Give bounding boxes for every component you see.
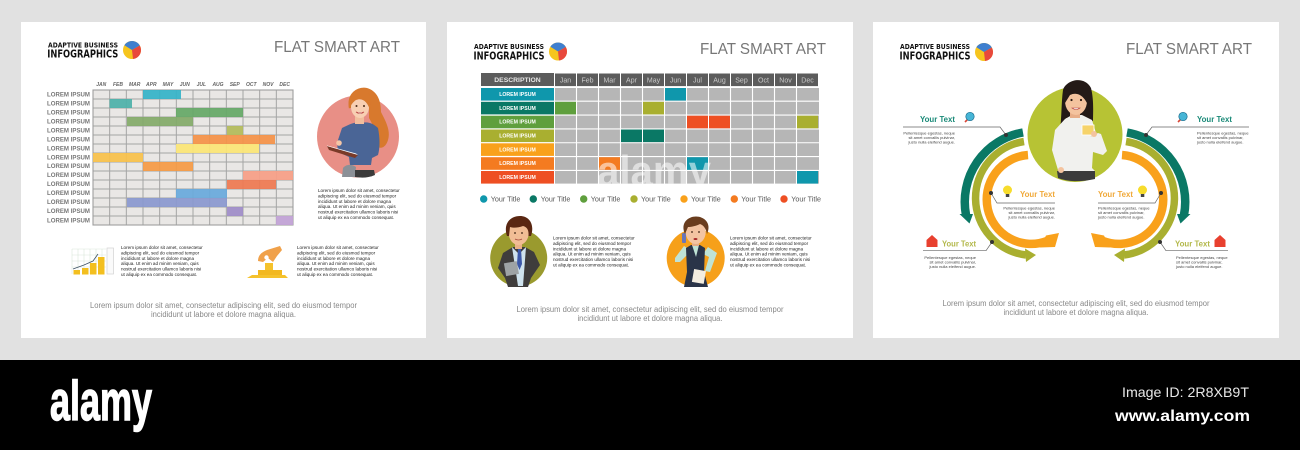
table header: DESCRIPTION: [494, 77, 541, 84]
footer text: [516, 305, 784, 323]
text block: aliqua. Ut enim ad minim veniam, quis: [730, 252, 808, 257]
icon: hand placing coin on coin stack: [247, 246, 288, 278]
icon: businesswoman with card in green circle: [1028, 80, 1122, 182]
table header: Nov: [779, 77, 792, 84]
logo: adaptive business infographics: ADAPTIVE BUSINESS: [474, 43, 544, 51]
row description cells: LOREM IPSUM: [499, 147, 536, 153]
footer text: Lorem ipsum dolor sit amet, consectetur adipiscing elit, sed do eiusmod tempor: [516, 305, 784, 314]
label: top right: sit amet convallis pulvinar,: [1197, 135, 1243, 140]
row labels: LOREM IPSUM: [47, 102, 90, 108]
text block: incididunt ut labore et dolore magna: [318, 199, 391, 204]
label: middle left: justo nulla eleifend augue.: [1008, 214, 1055, 220]
chart: gantt grid: [93, 90, 293, 225]
label: bottom left: sit amet convallis pulvinar,: [930, 259, 976, 264]
icon: magnifier: [965, 112, 974, 122]
legend: Your Title: [491, 195, 520, 204]
table header: Feb: [581, 77, 594, 84]
label: top right: Your Text: [1197, 114, 1232, 124]
legend: Your Title: [591, 195, 620, 204]
label: bottom left: justo nulla eleifend augue.: [929, 264, 976, 269]
table header: Dec: [801, 77, 814, 84]
text block: ut aliquip ex ea commodo consequat.: [318, 215, 394, 220]
row labels: [47, 93, 90, 225]
legend: [480, 195, 821, 204]
row labels: LOREM IPSUM: [47, 182, 90, 188]
month labels: FEB: [113, 82, 123, 88]
row labels: LOREM IPSUM: [47, 147, 90, 153]
text block: adipiscing elit, sed do eiusmod tempor: [730, 241, 809, 246]
label: middle left: [989, 186, 1056, 220]
row description cells: LOREM IPSUM: [499, 175, 536, 181]
text block: ut aliquip ex ea commodo consequat.: [553, 262, 629, 268]
label: bottom left: Pellentesque egestas, neque: [924, 255, 977, 260]
footer bar: alamy branding: [50, 369, 1250, 432]
row description cells: LOREM IPSUM: [499, 161, 536, 167]
arrows: left arcs: [960, 132, 1059, 262]
legend: Your Title: [641, 195, 671, 204]
label: top left: sit amet convallis pulvinar,: [909, 135, 955, 140]
text block: incididunt ut labore et dolore magna: [553, 246, 626, 251]
footer text: Lorem ipsum dolor sit amet, consectetur adipiscing elit, sed do eiusmod tempor: [90, 301, 357, 310]
icon: businesswoman on phone in orange circle: [667, 216, 725, 287]
arrows: right arcs: [1091, 132, 1190, 262]
row labels: LOREM IPSUM: [47, 173, 90, 179]
text block: Lorem ipsum dolor sit amet, consectetur: [121, 245, 203, 250]
month labels: OCT: [246, 82, 258, 88]
watermark: alamy: [597, 147, 711, 196]
table header: Apr: [626, 77, 638, 84]
label: top left: [903, 112, 1008, 144]
logo: adaptive business infographics: ADAPTIVE BUSINESS: [900, 43, 970, 51]
logo: adaptive business infographics: INFOGRAPHICS: [900, 50, 970, 62]
label: bottom right: sit amet convallis pulvinar,: [1176, 259, 1222, 264]
panel: schedule table slide: [447, 22, 853, 338]
label: middle right: sit amet convallis pulvinar,: [1098, 210, 1144, 215]
panel: circular arrows slide: [873, 22, 1279, 338]
text block: Lorem ipsum dolor sit amet, consectetur: [730, 236, 812, 240]
text block: nostrud exercitation ullamco laboris nisi: [318, 210, 398, 215]
row description cells: LOREM IPSUM: [499, 120, 536, 126]
text block: aliqua. Ut enim ad minim veniam, quis: [121, 261, 199, 266]
footer text: incididunt ut labore et dolore magna aliqua.: [578, 314, 722, 323]
title: FLAT SMART ART: [274, 39, 400, 56]
label: bottom right: [1158, 235, 1228, 269]
month labels: JUL: [197, 82, 206, 88]
row description cells: [481, 88, 554, 184]
text block: adipiscing elit, sed do eiusmod tempor: [318, 193, 397, 198]
logo: adaptive business infographics: [47, 41, 141, 61]
table header: Jun: [670, 77, 681, 84]
legend: Your Title: [741, 195, 771, 204]
legend: Your Title: [691, 195, 721, 204]
label: bottom right: Your Text: [1175, 238, 1210, 248]
label: middle left: Your Text: [1020, 189, 1055, 199]
table header: Sep: [735, 77, 748, 84]
icon: red envelope: [1214, 235, 1226, 247]
row labels: LOREM IPSUM: [47, 191, 90, 197]
logo: adaptive business infographics: [474, 42, 567, 62]
table header: Oct: [758, 77, 769, 84]
text block: incididunt ut labore et dolore magna: [730, 246, 803, 251]
text block: ut aliquip ex ea commodo consequat.: [297, 272, 373, 277]
month labels: MAR: [129, 82, 141, 88]
text block: nostrud exercitation ullamco laboris nisi: [121, 267, 201, 272]
month labels: APR: [145, 82, 157, 88]
label: middle right: Your Text: [1098, 189, 1133, 199]
icon: light bulb: [1138, 186, 1147, 197]
title: FLAT SMART ART: [700, 41, 826, 58]
table header: May: [647, 77, 661, 84]
row description cells: LOREM IPSUM: [499, 92, 536, 98]
table header: Mar: [603, 77, 616, 84]
text block: ut aliquip ex ea commodo consequat.: [730, 262, 806, 268]
label: top left: justo nulla eleifend augue.: [908, 140, 955, 144]
row labels: LOREM IPSUM: [47, 138, 90, 144]
text block: Lorem ipsum dolor sit amet, consectetur: [297, 245, 379, 250]
row labels: LOREM IPSUM: [47, 111, 90, 117]
label: middle right: [1097, 186, 1163, 220]
logo: adaptive business infographics: INFOGRAPHICS: [47, 49, 118, 61]
footer text: incididunt ut labore et dolore magna aliqua.: [1004, 308, 1148, 317]
label: top left: Pellentesque egestas, neque: [903, 130, 956, 136]
month labels: JAN: [96, 82, 107, 88]
table header: Jul: [693, 77, 702, 84]
label: top right: Pellentesque egestas, neque: [1197, 130, 1249, 136]
month labels: NOV: [263, 82, 274, 88]
text block: adipiscing elit, sed do eiusmod tempor: [553, 241, 632, 246]
label: bottom left: [923, 235, 994, 269]
website: www.alamy.com: [1114, 408, 1250, 425]
row labels: LOREM IPSUM: [47, 120, 90, 126]
table header: Jan: [560, 77, 571, 84]
icon: red envelope: [926, 235, 938, 247]
icon: woman with notebook in pink circle: [317, 88, 399, 178]
row description cells: LOREM IPSUM: [499, 106, 536, 112]
text block: adipiscing elit, sed do eiusmod tempor: [297, 250, 376, 255]
text block: incididunt ut labore et dolore magna: [297, 256, 370, 261]
text block: aliqua. Ut enim ad minim veniam, quis: [553, 252, 631, 257]
label: top right: justo nulla eleifend augue.: [1196, 140, 1243, 144]
table grid with highlighted cells: [555, 88, 819, 184]
icon: magnifier: [1178, 112, 1187, 122]
icon: businessman in olive circle: [490, 216, 547, 287]
label: bottom right: justo nulla eleifend augue.: [1175, 264, 1222, 269]
text block: aliqua. Ut enim ad minim veniam, quis: [318, 204, 396, 209]
text block: nostrud exercitation ullamco laboris nisi: [297, 267, 377, 272]
legend: Your Title: [541, 195, 570, 204]
text block: ut aliquip ex ea commodo consequat.: [121, 272, 197, 277]
label: middle left: Pellentesque egestas, neque: [1003, 206, 1056, 210]
footer text: [942, 299, 1210, 317]
logo: adaptive business infographics: ADAPTIVE BUSINESS: [48, 41, 118, 49]
text block: Lorem ipsum dolor sit amet, consectetur: [318, 188, 400, 193]
logo: adaptive business infographics: INFOGRAPHICS: [474, 50, 544, 62]
row labels: LOREM IPSUM: [47, 156, 90, 162]
row labels: LOREM IPSUM: [47, 164, 90, 170]
text block: nostrud exercitation ullamco laboris nisi: [553, 257, 633, 262]
month labels: AUG: [211, 82, 224, 88]
row labels: LOREM IPSUM: [47, 129, 90, 135]
row labels: LOREM IPSUM: [47, 93, 90, 99]
label: top right: [1144, 112, 1249, 144]
month labels: SEP: [230, 82, 240, 88]
panel: gantt chart slide: [21, 22, 426, 338]
text block: nostrud exercitation ullamco laboris nisi: [730, 257, 810, 262]
row labels: LOREM IPSUM: [47, 209, 90, 215]
logo: adaptive business infographics: [900, 43, 993, 62]
text block: adipiscing elit, sed do eiusmod tempor: [121, 250, 200, 255]
row labels: LOREM IPSUM: [47, 219, 90, 225]
icon: growth bar chart: [72, 248, 114, 274]
text block: aliqua. Ut enim ad minim veniam, quis: [297, 261, 375, 266]
text block: Lorem ipsum dolor sit amet, consectetur: [553, 236, 635, 240]
table header: Aug: [713, 77, 726, 84]
footer text: [90, 301, 357, 319]
month labels: DEC: [279, 82, 290, 88]
label: middle right: Pellentesque egestas, neque: [1098, 206, 1150, 210]
icon: light bulb: [1003, 186, 1012, 197]
label: bottom left: Your Text: [942, 238, 976, 248]
label: middle left: sit amet convallis pulvinar,: [1009, 210, 1055, 215]
image id: Image ID: 2R8XB9T: [1122, 384, 1249, 400]
footer text: incididunt ut labore et dolore magna aliqua.: [151, 310, 296, 319]
label: middle right: justo nulla eleifend augue.: [1097, 214, 1144, 220]
month labels: [96, 82, 290, 88]
label: top left: Your Text: [920, 114, 955, 124]
label: bottom right: Pellentesque egestas, neque: [1176, 255, 1228, 260]
footer text: Lorem ipsum dolor sit amet, consectetur adipiscing elit, sed do eiusmod tempor: [942, 299, 1210, 308]
month labels: MAY: [163, 82, 174, 88]
month labels: JUN: [180, 82, 190, 88]
row description cells: LOREM IPSUM: [499, 134, 536, 140]
alamy logo: alamy: [50, 369, 152, 432]
legend: Your Title: [791, 195, 821, 204]
row labels: LOREM IPSUM: [47, 200, 90, 206]
table header: [481, 73, 818, 86]
text block: incididunt ut labore et dolore magna: [121, 256, 194, 261]
title: FLAT SMART ART: [1126, 41, 1252, 58]
